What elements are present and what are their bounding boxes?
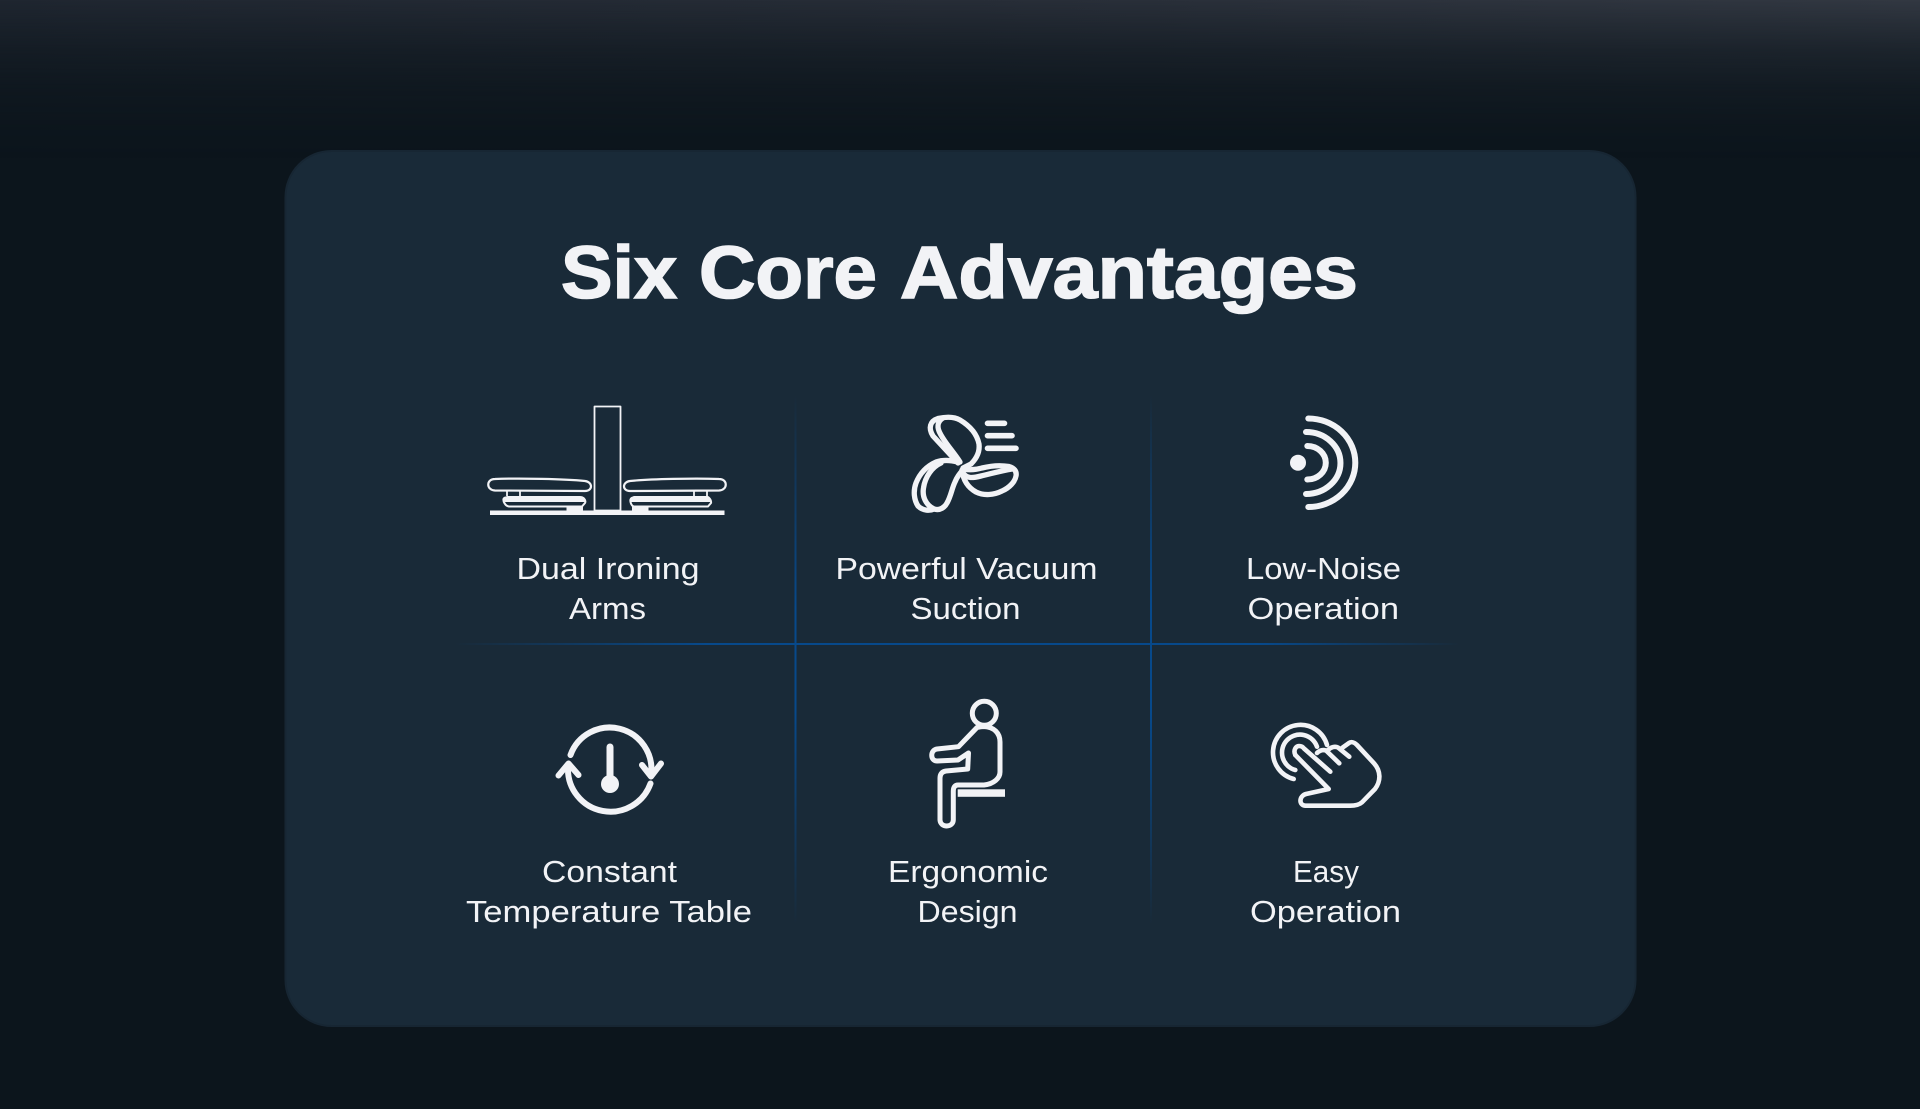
- icon: dual ironing arms: [488, 406, 726, 515]
- label: constant temperature table: Constant: [542, 854, 677, 889]
- icon: fan: [914, 417, 1016, 510]
- label: ergonomic design: [888, 854, 1048, 929]
- item: easy operation: [1250, 725, 1401, 929]
- item: low-noise operation: [1246, 418, 1401, 626]
- panel: six core advantages card: [286, 151, 1636, 1026]
- label: ergonomic design: Design: [918, 894, 1018, 929]
- title: Core: [699, 231, 877, 314]
- label: easy operation: Easy: [1293, 854, 1359, 889]
- label: ergonomic design: Ergonomic: [888, 854, 1048, 889]
- label: powerful vacuum suction: [836, 551, 1098, 626]
- label: low-noise operation: Operation: [1248, 591, 1399, 626]
- item: powerful vacuum suction: [836, 417, 1098, 626]
- icon: touch hand: [1273, 725, 1379, 806]
- icon: thermometer cycle: [558, 728, 661, 812]
- label: low-noise operation: [1246, 551, 1401, 626]
- item: ergonomic design: [888, 701, 1048, 929]
- icon: sound waves: [1290, 418, 1355, 507]
- label: dual ironing arms: [516, 551, 700, 626]
- label: powerful vacuum suction: Powerful Vacuum: [836, 551, 1098, 586]
- item: constant temperature table: [466, 728, 752, 929]
- grid dividers: [455, 395, 1460, 925]
- label: powerful vacuum suction: Suction: [910, 591, 1020, 626]
- label: constant temperature table: [466, 854, 752, 929]
- label: easy operation: Operation: [1250, 894, 1401, 929]
- label: constant temperature table: Temperature Table: [466, 894, 752, 929]
- label: dual ironing arms: Arms: [569, 591, 646, 626]
- item: dual ironing arms: [488, 406, 726, 626]
- background: [0, 0, 1920, 80]
- label: dual ironing arms: Dual Ironing: [516, 551, 700, 586]
- label: easy operation: [1250, 854, 1401, 929]
- icon: seated person: [932, 701, 1005, 826]
- title: Six: [561, 231, 677, 314]
- title: [561, 231, 1358, 314]
- title: Advantages: [900, 231, 1358, 314]
- label: low-noise operation: Low-Noise: [1246, 551, 1401, 586]
